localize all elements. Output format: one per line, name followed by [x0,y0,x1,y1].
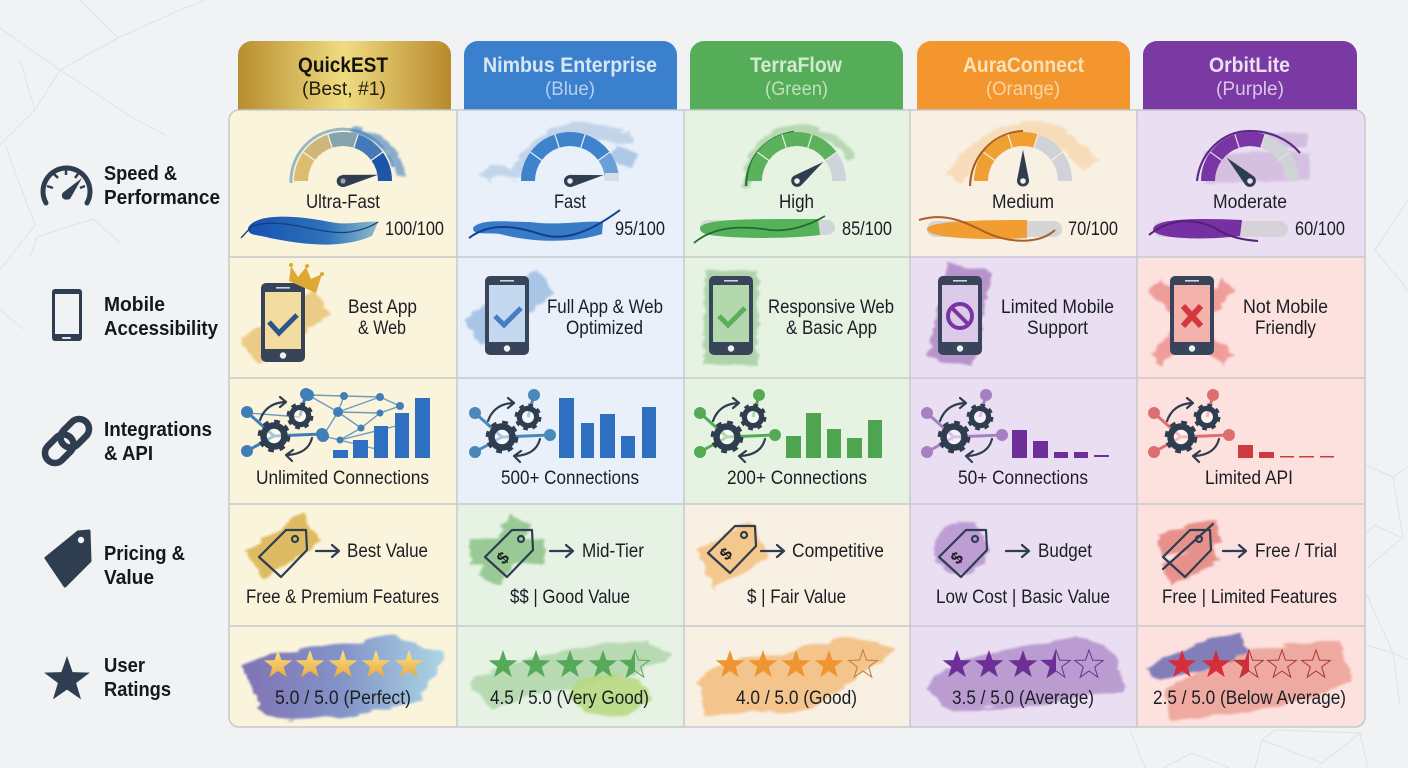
column header: TerraFlow: (Green) [765,79,828,100]
column header: OrbitLite [1143,41,1357,110]
ratings cell: TerraFlow: 4.0 / 5.0 (Good) [736,688,857,709]
pricing cell: AuraConnect: Low Cost | Basic Value [936,587,1110,608]
pricing cell: Nimbus Enterprise [470,520,645,608]
speed cell: AuraConnect: Medium [992,192,1054,213]
column header: Nimbus Enterprise: Nimbus Enterprise [483,54,657,77]
speed cell: OrbitLite [1149,131,1345,241]
mobile cell: OrbitLite [1155,276,1328,360]
gauge [953,131,1091,187]
star rating [716,650,877,677]
integrations cell: AuraConnect [921,389,1109,489]
speed cell: AuraConnect [919,131,1118,241]
brush stroke [934,521,988,575]
icon: chain link [41,415,93,467]
row label: Speed & Performance [43,162,220,209]
pricing cell: QuickEST: Best Value [347,541,428,562]
integrations cell: TerraFlow [694,389,882,489]
star rating [943,650,1103,677]
icon: crossed-out price tag [1163,524,1213,577]
brush stroke [470,642,672,710]
gauge [746,129,852,189]
bar chart [559,398,656,458]
icon: crown [289,263,324,293]
brush stroke [730,270,732,366]
column header: Nimbus Enterprise [464,41,677,110]
star rating [489,650,649,677]
gears [1148,389,1235,462]
row label: Integrations & API [41,415,212,467]
bar chart [1012,430,1109,458]
gauge [291,129,401,188]
arrow [550,545,573,557]
icon: dollar price tag: $ [716,544,737,564]
mobile cell: TerraFlow [709,270,894,366]
ratings cell: QuickEST: 5.0 / 5.0 (Perfect) [275,688,411,709]
arrow [316,545,339,557]
phone with check [261,283,305,362]
pricing cell: OrbitLite [1160,524,1337,608]
row label: Integrations & API: & API [104,442,153,465]
mobile cell: QuickEST: Best App [348,297,417,318]
ratings cell: TerraFlow [698,637,896,715]
arrow [1006,545,1029,557]
brush stroke [1165,640,1352,721]
pricing cell: AuraConnect: Budget [1038,541,1093,562]
ratings cell: OrbitLite [1146,633,1352,721]
column header: QuickEST: (Best, #1) [302,79,386,100]
row label: Pricing & Value [46,531,185,589]
score bar [469,210,620,241]
brush stroke [248,302,322,352]
phone with check [485,276,529,355]
icon: dollar price tag [939,530,987,577]
ratings cell: Nimbus Enterprise: 4.5 / 5.0 (Very Good) [490,688,649,709]
icon: dollar price tag: $ [947,548,968,568]
icon: price tag [259,530,307,577]
pricing cell: OrbitLite: Free | Limited Features [1162,587,1337,608]
mobile cell: Nimbus Enterprise: Optimized [566,318,643,339]
icon: dollar price tag [485,530,533,577]
phone with prohibited sign [938,276,982,355]
ratings cell: Nimbus Enterprise [470,642,672,716]
integrations cell: QuickEST: Unlimited Connections [256,468,429,489]
gears [694,389,781,462]
column header: OrbitLite: (Purple) [1216,79,1284,100]
brush stroke [705,540,760,568]
row label: User Ratings: User [104,654,145,677]
integrations cell: OrbitLite [1148,389,1334,489]
bar chart [1238,445,1334,458]
score bar [919,217,1062,241]
icon: price tag [46,531,90,586]
brush stroke [472,282,545,332]
ratings cell: AuraConnect: 3.5 / 5.0 (Average) [952,688,1094,709]
column header: TerraFlow: TerraFlow [750,54,843,77]
speed cell: AuraConnect: 70/100 [1068,219,1118,240]
ratings cell: QuickEST [242,635,445,719]
mobile cell: TerraFlow: Responsive Web [768,297,894,318]
score bar [694,216,835,243]
gears [241,388,328,461]
integrations cell: AuraConnect: 50+ Connections [958,468,1088,489]
speed cell: QuickEST: Ultra-Fast [306,192,381,213]
mobile cell: OrbitLite: Not Mobile [1243,297,1328,318]
row label: Integrations & API: Integrations [104,418,212,441]
pricing cell: AuraConnect [934,521,1110,608]
row label: Speed & Performance: Performance [104,186,220,209]
brush stroke [470,520,545,580]
phone with check [709,276,753,355]
speed cell: OrbitLite: Moderate [1213,192,1287,213]
pricing cell: QuickEST [246,527,439,608]
column header: AuraConnect: AuraConnect [963,54,1084,77]
star rating [264,650,423,677]
gauge [485,129,635,188]
row label: Mobile Accessibility: Accessibility [104,317,219,340]
brush stroke [698,637,896,715]
mobile cell: OrbitLite: Friendly [1255,318,1316,339]
pricing cell: TerraFlow: Competitive [792,541,884,562]
icon: dollar price tag [708,526,756,573]
mobile cell: QuickEST: & Web [358,318,406,339]
ratings cell: AuraConnect [928,636,1125,711]
bar chart [786,413,882,458]
gears [921,389,1008,462]
pricing cell: Nimbus Enterprise: $$ | Good Value [510,587,630,608]
brush stroke [254,527,312,566]
bar chart [333,398,430,458]
star rating [1168,650,1330,677]
icon: phone [52,289,82,341]
row label: Mobile Accessibility [52,289,219,341]
speed cell: TerraFlow [694,129,892,243]
speed cell: TerraFlow: High [779,192,814,213]
arrow [1223,545,1246,557]
gauge [1197,131,1310,189]
brush stroke [1160,530,1218,575]
row label: User Ratings [44,654,171,701]
column header: QuickEST: QuickEST [298,54,388,77]
icon: dollar price tag: $ [493,548,514,568]
icon: speedometer [43,168,90,203]
mobile cell: QuickEST [248,263,417,362]
brush stroke [1155,285,1230,360]
mobile cell: AuraConnect [938,268,1114,362]
integrations cell: OrbitLite: Limited API [1205,468,1293,489]
score bar [1149,219,1288,241]
phone with cross [1170,276,1214,355]
row label: Pricing & Value: Pricing & [104,542,185,565]
mobile cell: TerraFlow: & Basic App [786,318,877,339]
pricing cell: OrbitLite: Free / Trial [1255,541,1337,562]
integrations cell: Nimbus Enterprise [469,389,656,489]
icon: star [44,656,90,699]
pricing cell: TerraFlow [705,526,884,608]
mobile cell: AuraConnect: Limited Mobile [1001,297,1114,318]
row label: Mobile Accessibility: Mobile [104,293,165,316]
speed cell: QuickEST: 100/100 [385,219,444,240]
pricing cell: TerraFlow: $ | Fair Value [747,587,846,608]
pricing cell: QuickEST: Free & Premium Features [246,587,439,608]
mobile cell: Nimbus Enterprise [472,276,663,355]
network diagram [248,389,404,450]
speed cell: Nimbus Enterprise: Fast [554,192,587,213]
row label: User Ratings: Ratings [104,678,171,701]
gears [469,389,556,462]
column header: TerraFlow [690,41,903,110]
column header: AuraConnect: (Orange) [986,79,1060,100]
column header: Nimbus Enterprise: (Blue) [545,79,595,100]
table background cells [229,110,1365,727]
speed cell: Nimbus Enterprise [469,129,665,241]
mobile cell: Nimbus Enterprise: Full App & Web [547,297,663,318]
brush stroke [950,268,970,362]
brush stroke [242,635,445,719]
speed cell: OrbitLite: 60/100 [1295,219,1345,240]
column header: OrbitLite: OrbitLite [1209,54,1290,77]
score bar [241,217,378,245]
integrations cell: Nimbus Enterprise: 500+ Connections [501,468,639,489]
speed cell: QuickEST [241,129,444,245]
mobile cell: AuraConnect: Support [1027,318,1089,339]
pricing cell: Nimbus Enterprise: Mid-Tier [582,541,645,562]
speed cell: TerraFlow: 85/100 [842,219,892,240]
arrow [761,545,784,557]
row label: Speed & Performance: Speed & [104,162,177,185]
ratings cell: OrbitLite: 2.5 / 5.0 (Below Average) [1153,688,1346,709]
integrations cell: QuickEST [241,388,430,489]
brush stroke [928,636,1125,711]
column header: AuraConnect [917,41,1130,110]
column header: QuickEST [238,41,451,110]
row label: Pricing & Value: Value [104,566,154,589]
speed cell: Nimbus Enterprise: 95/100 [615,219,665,240]
integrations cell: TerraFlow: 200+ Connections [727,468,867,489]
